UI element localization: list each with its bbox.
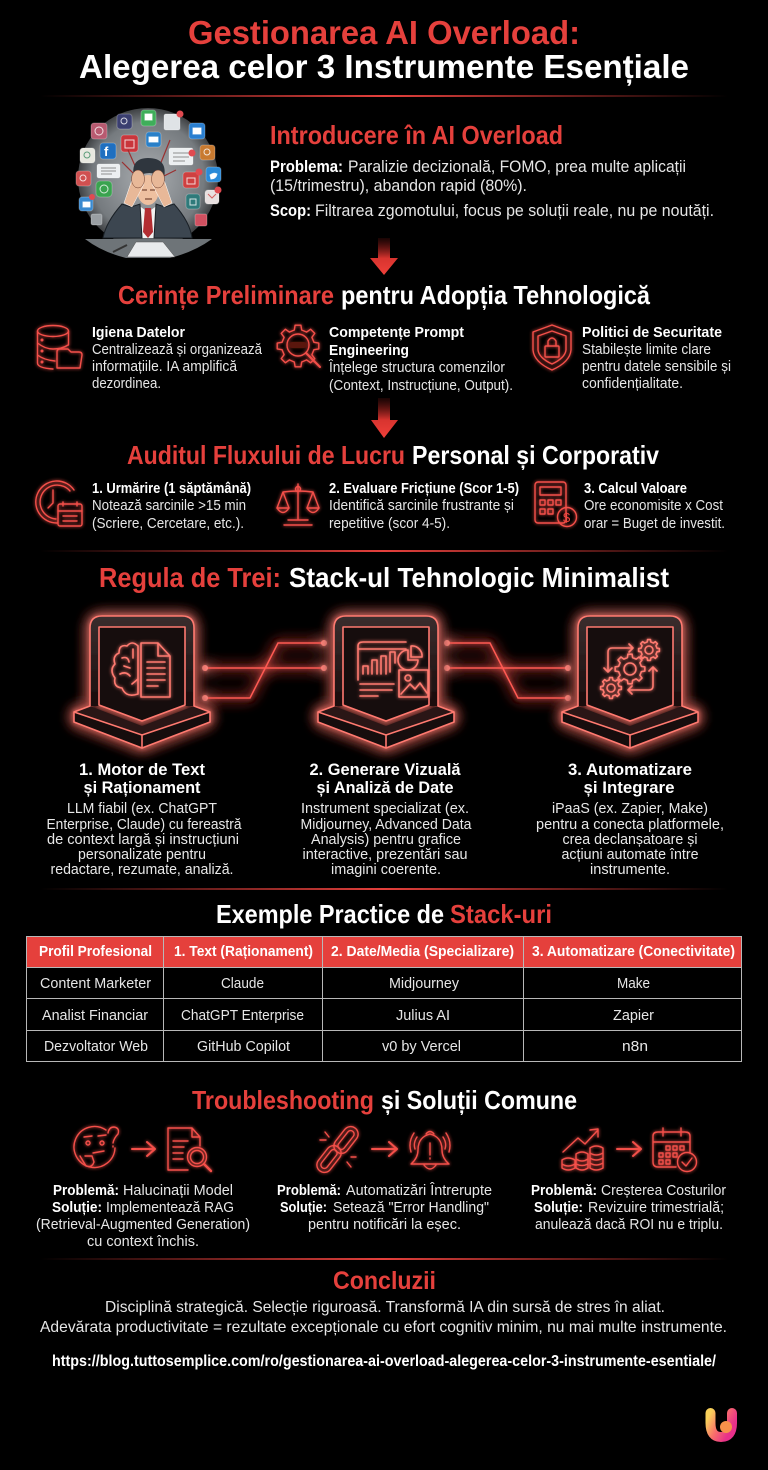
text: security policies: Politici de Securitate [582,324,722,341]
text: automation: pentru a conecta platformele, [536,816,724,833]
table: stack examples: GitHub Copilot [197,1038,291,1055]
heading: audit: Auditul Fluxului de Lucru [127,440,405,470]
text: data hygiene [92,324,263,392]
text: hallucinations: Halucinații Model [123,1182,233,1199]
text: value calculation [584,480,725,532]
table: stack examples [26,936,742,1062]
heading: prerequisites: pentru Adopția Tehnologică [341,280,650,310]
panel: introduction [76,108,714,258]
text: value calculation: Ore economisite x Cost [584,497,724,514]
text: tracking: (Scriere, Cercetare, etc.). [92,515,244,532]
text block: conclusions [40,1299,727,1336]
heading: practical stacks: Exemple Practice de [216,899,444,929]
text: rising costs: Soluție: [534,1199,583,1216]
text: prompt engineering: (Context, Instrucțiune, Output). [329,377,513,394]
text block: problem and scope: Scop: [270,201,311,220]
table: stack examples: Midjourney [389,975,459,992]
panel: workflow audit: $ [563,510,571,525]
text: visual generation: Midjourney, Advanced Data [300,816,472,833]
icon: gears and arrows [601,640,659,698]
table: stack examples: Make [617,975,650,992]
text: visual generation: 2. Generare Vizuală [310,760,461,779]
text: automation [536,760,724,878]
source url: https://blog.tuttosemplice.com/ro/gestionarea-ai-overload-alegerea-celor-3-instrumente-esentiale/ [52,1353,717,1370]
card: text engine [74,616,210,748]
arrow: prerequisites to audit [371,398,398,438]
text: hallucinations: Implementează RAG [106,1199,234,1216]
heading: prerequisites: Cerințe Preliminare [118,280,334,310]
table: stack examples: Claude [221,975,264,992]
text: hallucinations [36,1182,250,1250]
logo [710,1413,732,1437]
text: automation: iPaaS (ex. Zapier, Make) [552,800,708,817]
text: prompt engineering: Înțelege structura comenzilor [328,359,505,376]
panel: practical stacks [26,899,742,1062]
table: stack examples: Dezvoltator Web [44,1038,148,1055]
icon: calculator with dollar [535,482,576,526]
heading: conclusions: Concluzii [333,1267,436,1295]
title: Alegerea celor 3 Instrumente Esențiale [79,48,689,86]
text: hallucinations: Soluție: [52,1199,102,1216]
text: visual generation: Analysis) pentru grafice [311,831,461,848]
text: rising costs [531,1182,726,1233]
icon: broken chain to alarm bell [314,1124,450,1175]
table: stack examples: Profil Profesional [39,943,152,960]
table: stack examples: Content Marketer [40,975,151,992]
text: text engine [46,760,242,878]
table: stack examples: Julius AI [396,1007,450,1024]
panel: workflow audit [36,440,725,532]
table: stack examples: Zapier [613,1007,654,1024]
text: visual generation [300,760,472,878]
heading: troubleshooting: Troubleshooting [192,1085,374,1115]
heading: rule of three: Regula de Trei: [99,562,281,593]
title: Gestionarea AI Overload: [188,14,580,51]
text: security policies: pentru datele sensibile și [582,358,731,375]
text: automation: și Integrare [584,778,674,797]
text: tracking [92,480,251,532]
table: stack examples: v0 by Vercel [382,1038,461,1055]
text: friction score [329,480,519,532]
text: hallucinations: (Retrieval-Augmented Generation) [36,1216,250,1233]
icon: security shield [533,325,571,370]
text: prompt engineering: Engineering [329,342,409,359]
text: text engine: Enterprise, Claude) cu fereastră [46,816,242,833]
arrow: intro to prerequisites [370,238,398,275]
text: security policies [582,324,731,392]
heading: audit: Personal și Corporativ [412,440,659,470]
text: text engine: LLM fiabil (ex. ChatGPT [67,800,217,817]
text: data hygiene: informațiile. IA amplifică [92,358,238,375]
text: rising costs: Revizuire trimestrială; [588,1199,724,1216]
heading: rule of three: Stack-ul Tehnologic Minimalist [289,562,669,593]
text: text engine: 1. Motor de Text [79,760,205,779]
text: rising costs: Creșterea Costurilor [601,1182,726,1199]
text: broken automations [277,1182,492,1233]
text: tracking: Notează sarcinile >15 min [92,497,246,514]
text: visual generation: interactive, prezentări sau [302,846,468,863]
text: tracking: 1. Urmărire (1 săptămână) [92,480,251,497]
text: visual generation: imagini coerente. [331,861,441,878]
icon: gear with magnifier [277,325,320,367]
heading: troubleshooting [192,1085,577,1115]
text: broken automations: Soluție: [280,1199,327,1216]
text: rising costs: Problemă: [531,1182,597,1199]
heading: practical stacks: Stack-uri [450,899,552,929]
illustration: overwhelmed man surrounded by app icons [76,108,222,258]
heading: rule of three [99,562,669,593]
text: hallucinations: cu context închis. [87,1233,199,1250]
icon: database and folder [38,326,82,369]
text: security policies: confidențialitate. [582,375,683,392]
table: stack examples: Analist Financiar [42,1007,148,1024]
text: broken automations: pentru notificări la eșec. [308,1216,461,1233]
table: stack examples: 2. Date/Media (Specializare) [331,943,514,960]
text: automation: instrumente. [590,861,670,878]
text: friction score: Identifică sarcinile frustrante și [329,497,514,514]
text: automation: crea declanșatoare și [562,831,698,848]
icon: clock and calendar [36,481,82,526]
text: visual generation: Instrument specializat (ex. [301,800,469,817]
text block: problem and scope [270,157,714,220]
card: automation [562,616,698,748]
text: hallucinations: Problemă: [53,1182,119,1199]
table: stack examples: 3. Automatizare (Conectivitate) [532,943,735,960]
text: data hygiene: dezordinea. [92,375,161,392]
panel: conclusions [40,1267,727,1370]
icon: confused face to document search [74,1126,211,1171]
table: stack examples: ChatGPT Enterprise [181,1007,304,1024]
text: value calculation: 3. Calcul Valoare [584,480,687,497]
text: text engine: redactare, rezumate, analiză. [50,861,234,878]
text: broken automations: Automatizări Întrerupte [346,1182,492,1199]
table: stack examples: n8n [622,1038,648,1055]
text block: problem and scope: Paralizie decizională, FOMO, prea multe aplicații [348,157,686,176]
text: automation: acțiuni automate între [562,846,698,863]
icon: balance scale [277,484,319,525]
text: text engine: de context largă și instrucțiuni [47,831,239,848]
text block: problem and scope: (15/trimestru), abandon rapid (80%). [270,176,527,195]
card: visual generation [318,616,454,748]
heading: troubleshooting: și Soluții Comune [381,1085,577,1115]
text: prompt engineering [328,324,513,394]
text: broken automations: Setează "Error Handling" [333,1199,489,1216]
icon: rising costs to calendar check [562,1128,696,1172]
panel: rule of three [46,562,724,878]
text: data hygiene: Igiena Datelor [92,324,185,341]
connectors between cards [202,640,571,701]
text: value calculation: orar = Buget de investit. [584,515,725,532]
heading: introduction: Introducere în AI Overload [270,120,563,150]
text: friction score: 2. Evaluare Fricțiune (Scor 1-5) [329,480,519,497]
text: prompt engineering: Competențe Prompt [329,324,464,341]
title [79,14,689,86]
text block: conclusions: Adevărata productivitate = rezultate excepționale cu efort cognitiv minim, nu mai multe instrumente. [40,1319,727,1336]
table: stack examples: 1. Text (Raționament) [174,943,313,960]
panel: troubleshooting [36,1085,726,1250]
man [134,205,162,238]
panel: prerequisites [38,280,731,394]
text: visual generation: și Analiză de Date [316,778,454,797]
text: automation: 3. Automatizare [568,760,692,779]
heading: prerequisites [118,280,650,310]
text: broken automations: Problemă: [277,1182,341,1199]
heading: audit [127,440,659,470]
icon: brain and document [112,643,170,697]
text: text engine: și Raționament [84,778,201,797]
text block: conclusions: Disciplină strategică. Selecție riguroasă. Transformă IA din sursă de stres în aliat. [105,1299,665,1316]
text: security policies: Stabilește limite clare [582,341,711,358]
text: data hygiene: Centralizează și organizează [92,341,263,358]
text: rising costs: anulează dacă ROI nu e triplu. [535,1216,723,1233]
text block: problem and scope: Filtrarea zgomotului, focus pe soluții reale, nu pe noutăți. [315,201,714,220]
text block: problem and scope: Problema: [270,157,343,176]
text: friction score: repetitive (scor 4-5). [329,515,450,532]
text: text engine: personalizate pentru [78,846,206,863]
icon: chart and image [358,642,428,697]
illustration: overwhelmed man surrounded by app icons: f [104,144,109,159]
